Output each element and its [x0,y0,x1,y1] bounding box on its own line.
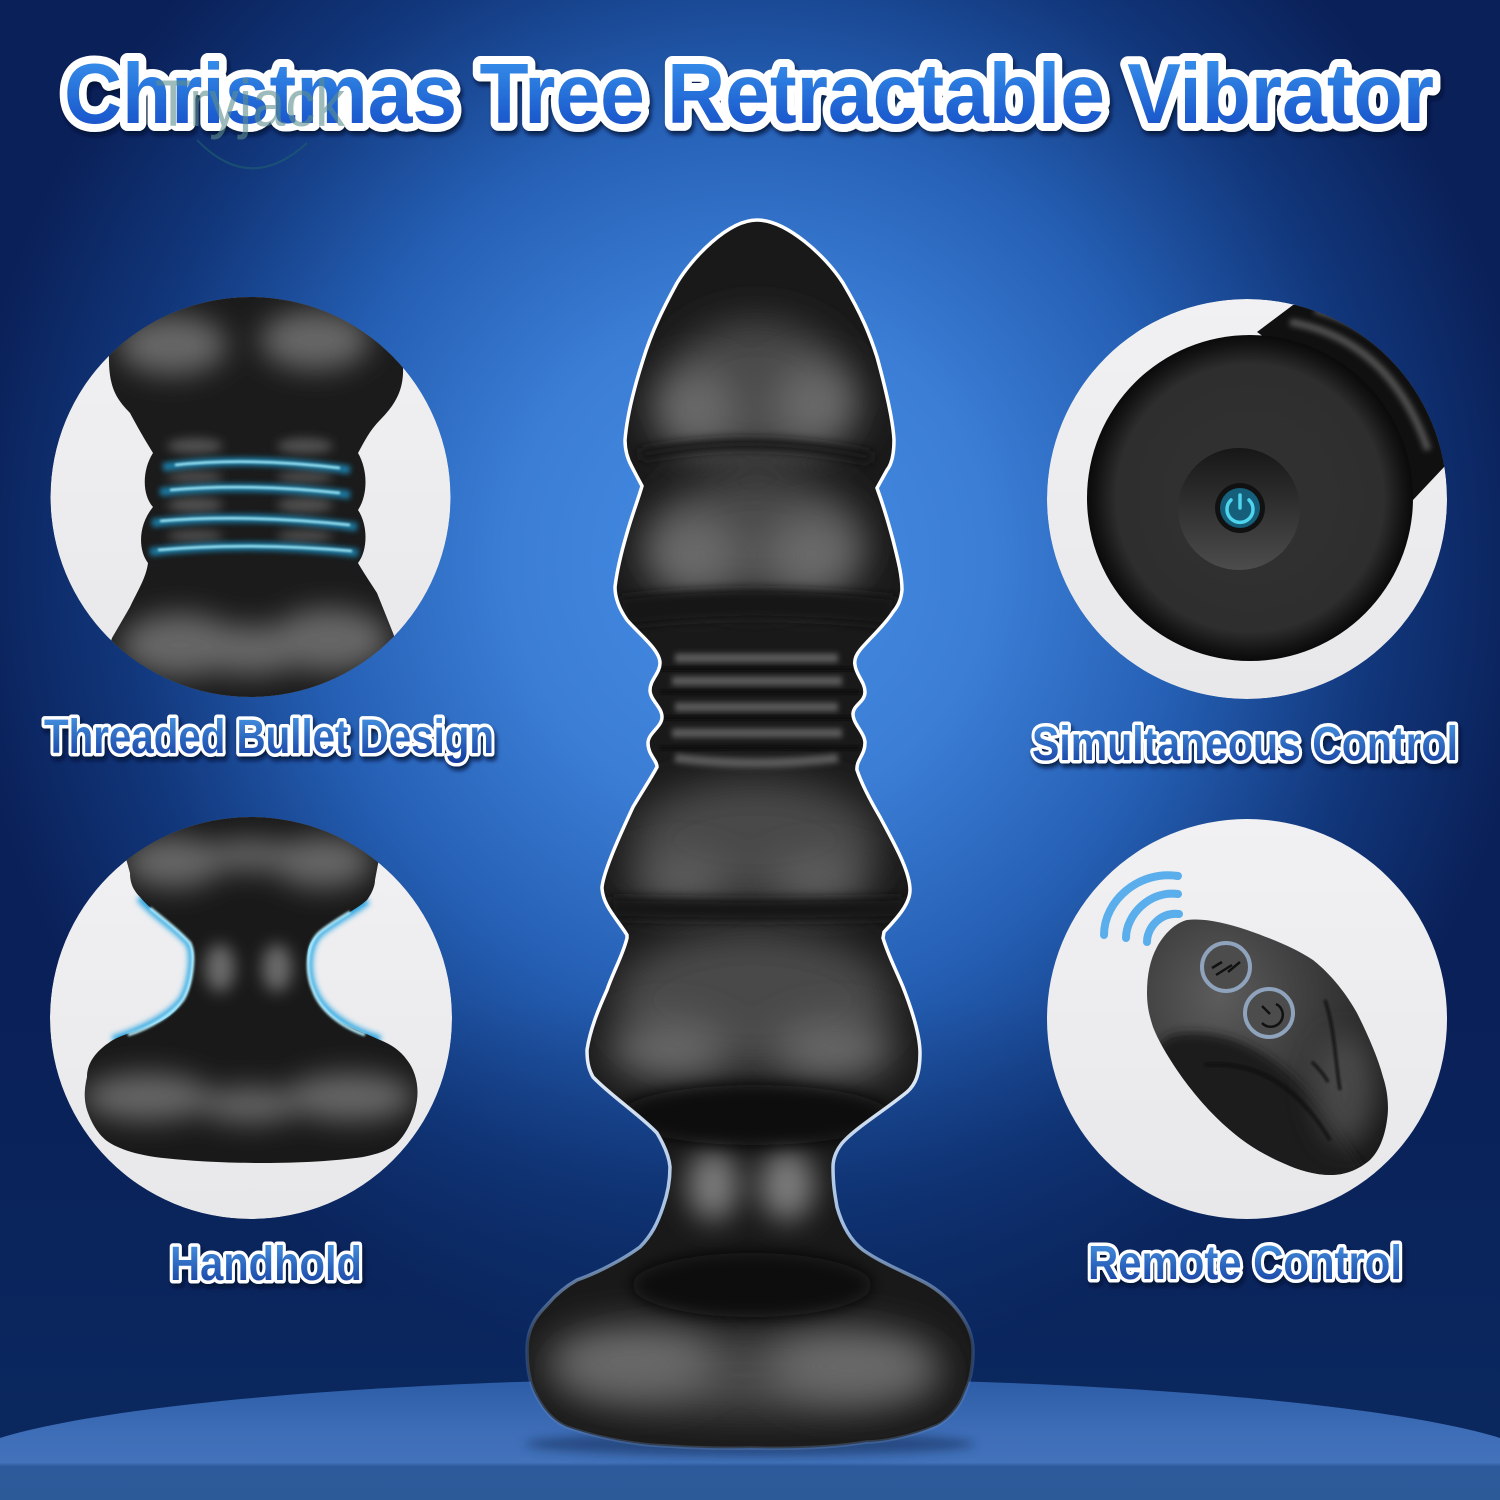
thread rings [672,658,842,763]
white circle [1047,819,1447,1219]
title: Christmas Tree Retractable Vibrator [64,47,1434,142]
product: main vibrator body [527,220,973,1448]
button: power [1245,989,1293,1037]
icon: wireless signal waves [1104,875,1179,942]
power button [1215,483,1265,533]
label: remote control: Remote Control [1088,1237,1402,1290]
dark segment grooves [610,444,905,910]
handhold close-up circle [50,800,452,1219]
panel: remote control [1047,819,1447,1290]
blue edge glow [113,897,380,1040]
remote control device [1140,920,1388,1180]
threaded close-up circle [50,290,450,710]
panel: threaded bullet design [44,290,494,764]
watermark logo: Tryjack [155,66,346,140]
threaded shaft behind base [1257,300,1460,500]
neck highlights [687,1149,815,1221]
panel: simultaneous control [1032,299,1460,771]
label: threaded bullet design: Threaded Bullet Design [44,711,494,764]
button: vibration mode [1202,943,1250,991]
label: handhold: Handhold [170,1238,362,1291]
base close-up circle with power button [1047,299,1460,699]
watermark logo [155,66,346,168]
panel: handhold [50,800,452,1291]
